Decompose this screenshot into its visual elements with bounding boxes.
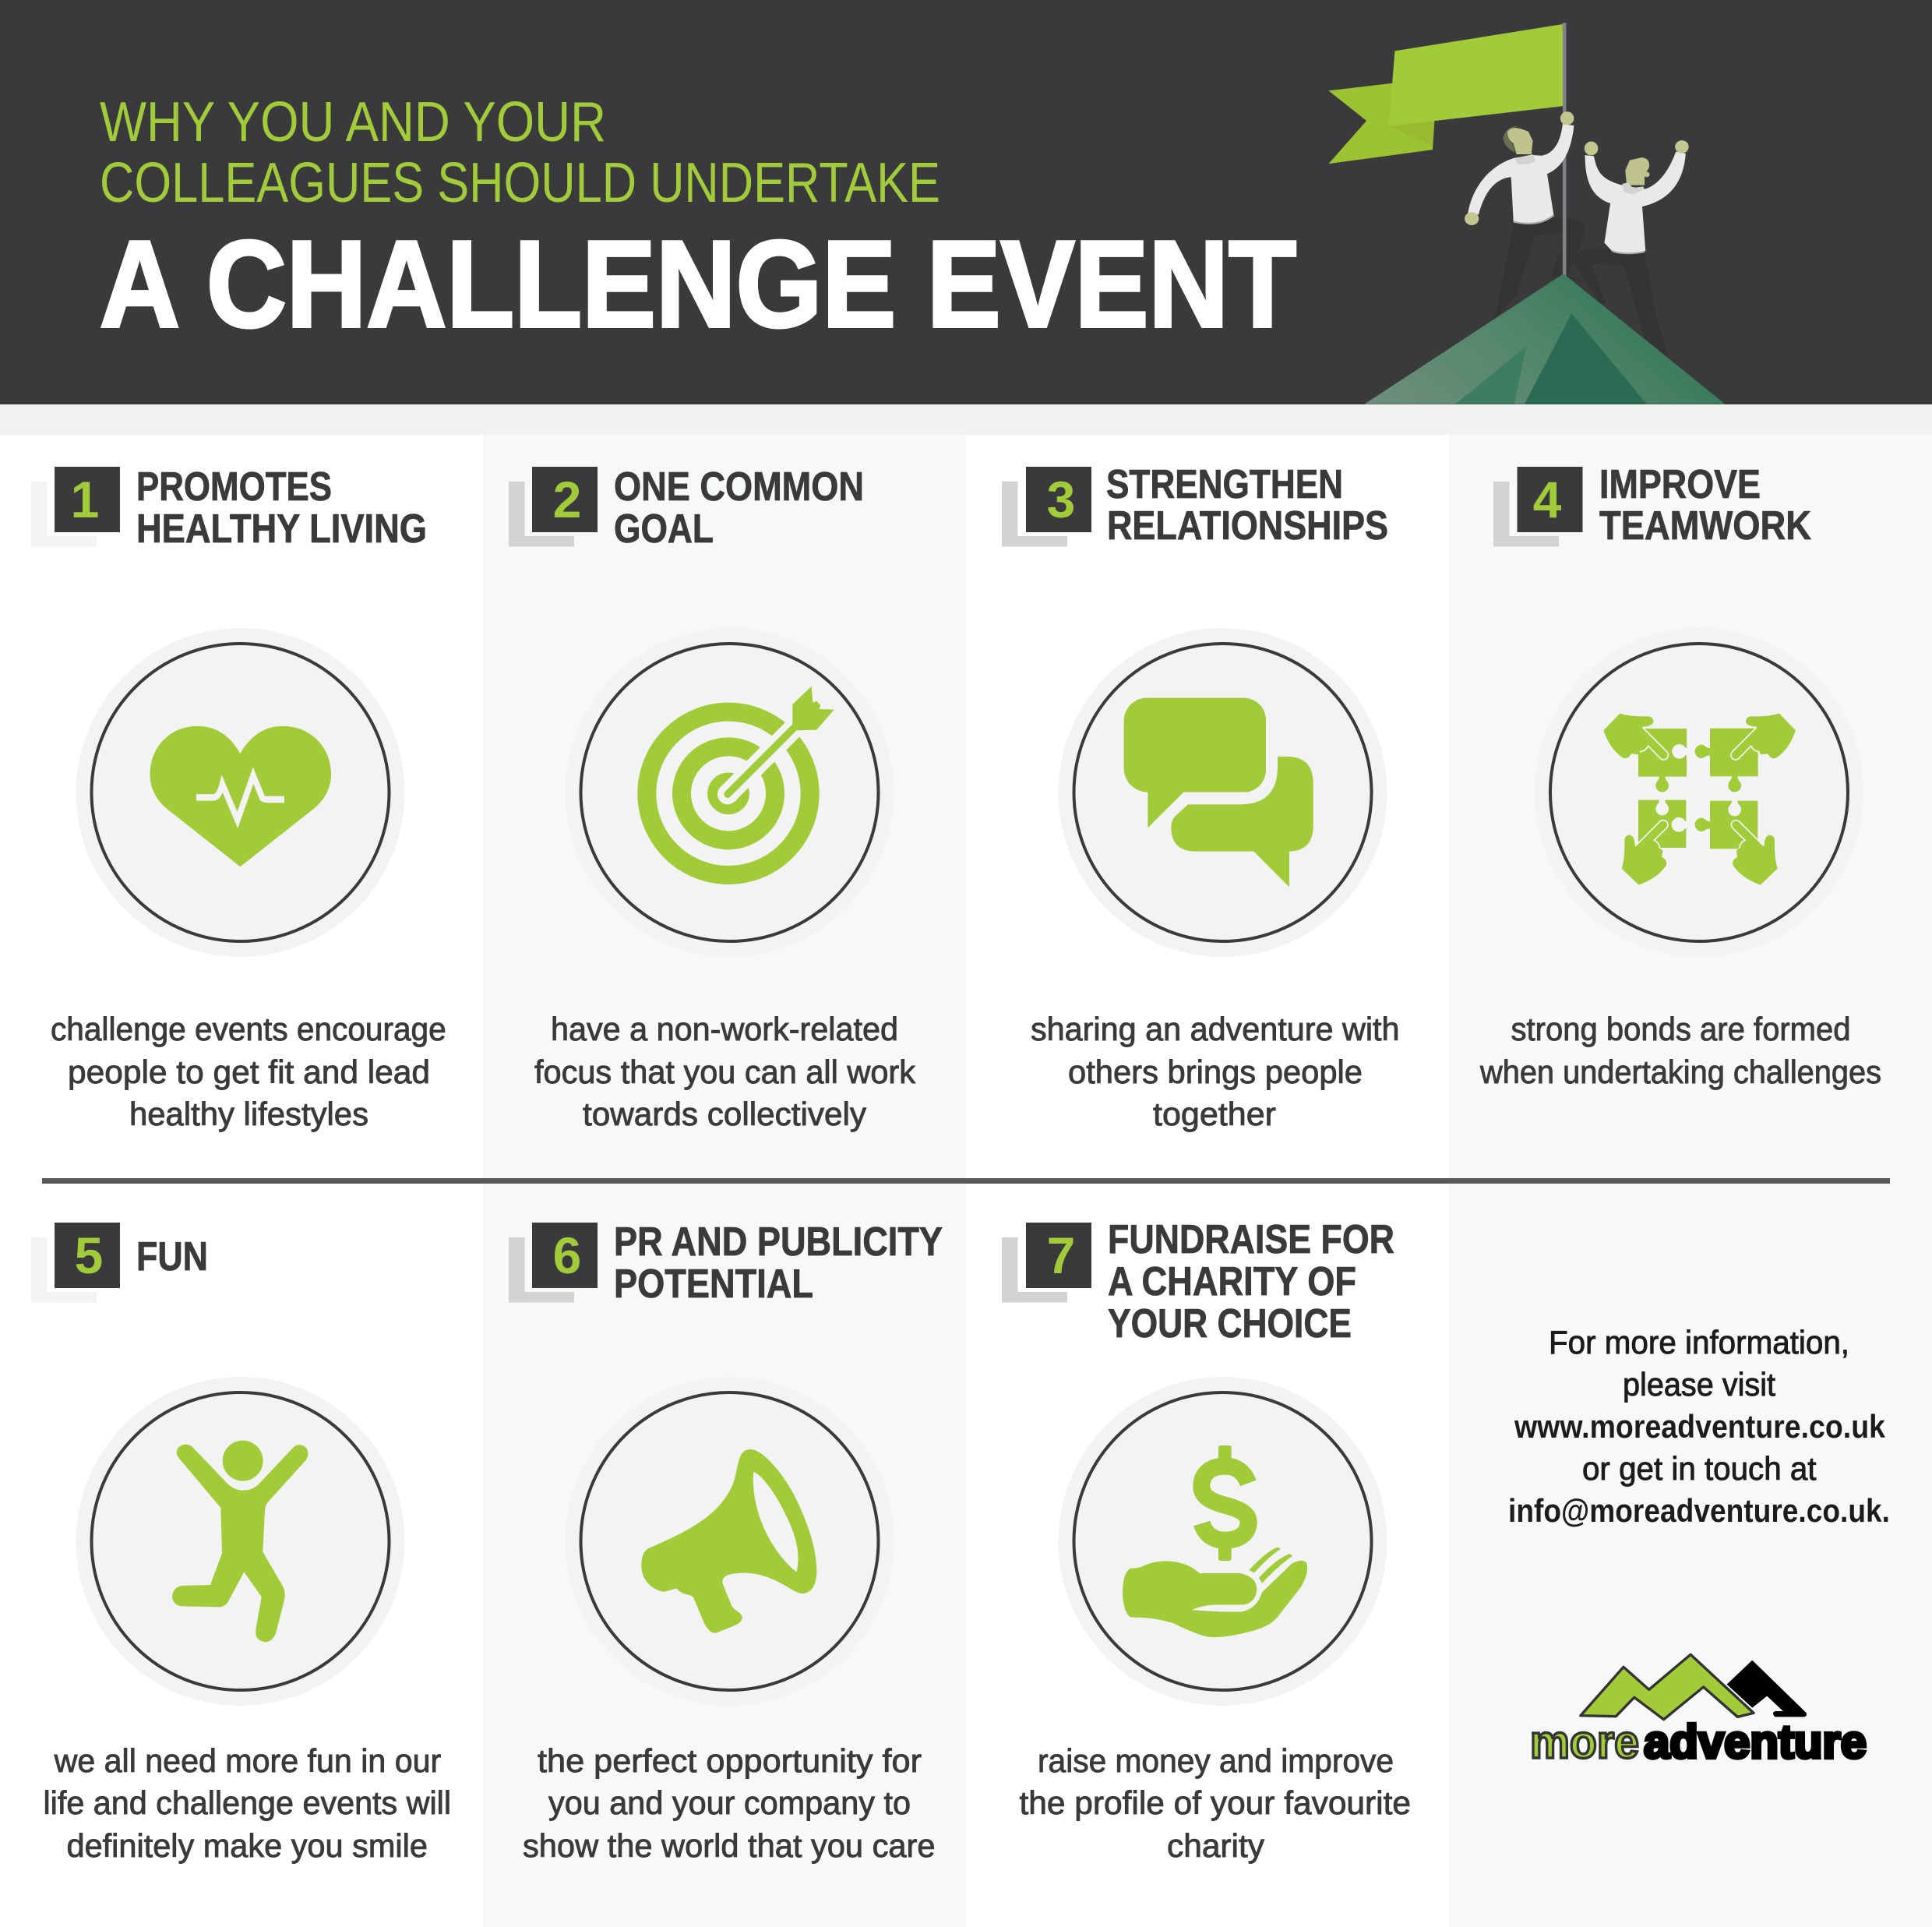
logo: more adventure: more xyxy=(1530,1716,1639,1768)
icon: speech bubbles xyxy=(1058,628,1387,957)
heading 6: POTENTIAL xyxy=(614,1262,813,1307)
logo: more adventure xyxy=(1530,1654,1867,1768)
body text 4: when undertaking challenges xyxy=(1479,1053,1881,1090)
heading 4: TEAMWORK xyxy=(1599,503,1811,549)
body text 5: we all need more fun in our xyxy=(54,1742,441,1779)
body text 2: focus that you can all work xyxy=(534,1053,916,1090)
body text 3: together xyxy=(1153,1096,1276,1132)
number badge 4 xyxy=(1493,467,1583,547)
contact text xyxy=(1508,1324,1890,1529)
title: WHY YOU AND YOUR xyxy=(100,91,606,154)
panel: 6 PR and publicity potential xyxy=(509,1219,943,1864)
number badge 5: 5 xyxy=(75,1226,103,1284)
heading 6: PR AND PUBLICITY xyxy=(614,1219,943,1265)
panel: 3 strengthen relationships xyxy=(1002,462,1399,1132)
heading 2: GOAL xyxy=(614,506,714,552)
divider xyxy=(42,1178,1890,1184)
body text 2: have a non-work-related xyxy=(551,1011,898,1047)
icon: dollar over open hand xyxy=(1058,1377,1387,1706)
heading 1 xyxy=(136,464,427,552)
panel: 1 promotes healthy living xyxy=(31,464,446,1132)
icon: jumping person xyxy=(76,1377,405,1706)
body text 1 xyxy=(51,1011,446,1132)
body text 6: show the world that you care xyxy=(523,1827,935,1864)
heading 3: RELATIONSHIPS xyxy=(1107,503,1388,549)
body text 3 xyxy=(1031,1011,1399,1132)
number badge 4: 4 xyxy=(1533,471,1562,528)
body text 5 xyxy=(44,1742,451,1864)
icon: target with arrow xyxy=(566,628,894,957)
number badge 3: 3 xyxy=(1047,471,1075,528)
number badge 6: 6 xyxy=(553,1226,581,1284)
heading 6 xyxy=(614,1219,943,1307)
heading 1: PROMOTES xyxy=(136,464,332,510)
number badge 3 xyxy=(1002,467,1091,547)
heading 1: HEALTHY LIVING xyxy=(136,506,427,552)
panel: 7 fundraise for a charity xyxy=(1002,1217,1411,1864)
heading 4 xyxy=(1599,462,1811,549)
number badge 7: 7 xyxy=(1047,1226,1075,1284)
number badge 1: 1 xyxy=(71,471,99,528)
number badge 7 xyxy=(1002,1223,1091,1303)
panel: 4 improve teamwork xyxy=(1479,462,1881,1090)
body text 1: healthy lifestyles xyxy=(129,1096,368,1132)
heading 7: A CHARITY OF xyxy=(1108,1259,1356,1304)
body text 2 xyxy=(534,1011,916,1132)
body text 1: challenge events encourage xyxy=(51,1011,446,1047)
body text 3: others brings people xyxy=(1068,1053,1363,1090)
body text 4: strong bonds are formed xyxy=(1511,1011,1851,1047)
contact text: please visit xyxy=(1623,1366,1775,1403)
contact text: info@moreadventure.co.uk. xyxy=(1508,1492,1890,1529)
number badge 2: 2 xyxy=(553,471,581,528)
number badge 2 xyxy=(509,467,598,547)
heading 3: STRENGTHEN xyxy=(1106,462,1343,507)
icon: hands joining puzzle pieces xyxy=(1535,628,1863,957)
contact text: www.moreadventure.co.uk xyxy=(1514,1408,1886,1445)
panel: 5 fun xyxy=(31,1223,451,1864)
number badge 1 xyxy=(31,467,120,547)
title: A CHALLENGE EVENT xyxy=(100,216,1296,353)
heading 3 xyxy=(1106,462,1388,549)
logo: more adventure: adventure xyxy=(1644,1716,1867,1768)
body text 7: the profile of your favourite xyxy=(1019,1784,1411,1821)
icon: megaphone xyxy=(566,1377,894,1706)
header banner xyxy=(0,0,1932,404)
heading 2: ONE COMMON xyxy=(614,464,864,510)
body text 2: towards collectively xyxy=(583,1096,866,1132)
body text 5: life and challenge events will xyxy=(44,1784,451,1821)
heading 7: FUNDRAISE FOR xyxy=(1108,1217,1394,1262)
heading 5: FUN xyxy=(136,1234,208,1279)
body text 6: the perfect opportunity for xyxy=(538,1742,922,1779)
illustration: two people planting a flag on a mountain xyxy=(1328,23,1725,404)
number badge 5 xyxy=(31,1223,120,1303)
contact text: For more information, xyxy=(1549,1324,1849,1361)
body text 7: raise money and improve xyxy=(1038,1742,1394,1779)
contact text: or get in touch at xyxy=(1582,1450,1817,1487)
heading 4: IMPROVE xyxy=(1599,462,1761,507)
heading 2 xyxy=(614,464,864,552)
panel: contact information and logo xyxy=(1508,1324,1890,1768)
heading 7 xyxy=(1108,1217,1394,1346)
heading 7: YOUR CHOICE xyxy=(1108,1301,1352,1346)
body text 7 xyxy=(1019,1742,1411,1864)
body text 7: charity xyxy=(1167,1827,1264,1864)
body text 3: sharing an adventure with xyxy=(1031,1011,1399,1047)
body text 6: you and your company to xyxy=(548,1784,911,1821)
body text 1: people to get fit and lead xyxy=(68,1053,430,1090)
icon: heart with pulse xyxy=(76,628,405,957)
body text 4 xyxy=(1479,1011,1881,1090)
body text 6 xyxy=(523,1742,935,1864)
body text 5: definitely make you smile xyxy=(67,1827,428,1864)
title xyxy=(100,91,1296,353)
title: COLLEAGUES SHOULD UNDERTAKE xyxy=(100,152,940,214)
panel: 2 one common goal xyxy=(509,464,916,1132)
number badge 6 xyxy=(509,1223,598,1303)
